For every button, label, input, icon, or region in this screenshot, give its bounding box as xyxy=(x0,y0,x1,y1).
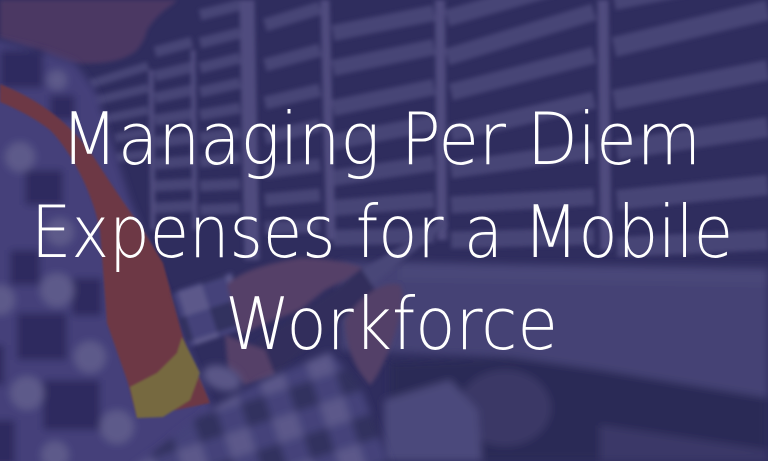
photo: forearm sleeve and cuff xyxy=(130,352,392,461)
photo: plaid shirt xyxy=(0,36,215,461)
photo: workman's face xyxy=(0,0,177,64)
photo: pipe and lower machinery xyxy=(340,262,768,461)
photo: safety vest xyxy=(0,84,210,418)
title: Workforce xyxy=(225,282,558,366)
posts xyxy=(151,0,606,260)
title: Managing Per Diem xyxy=(61,97,701,181)
photo: cooling tower louvres xyxy=(90,0,768,260)
photo: sleeve and hands holding tablet xyxy=(172,222,448,385)
title xyxy=(31,97,733,366)
